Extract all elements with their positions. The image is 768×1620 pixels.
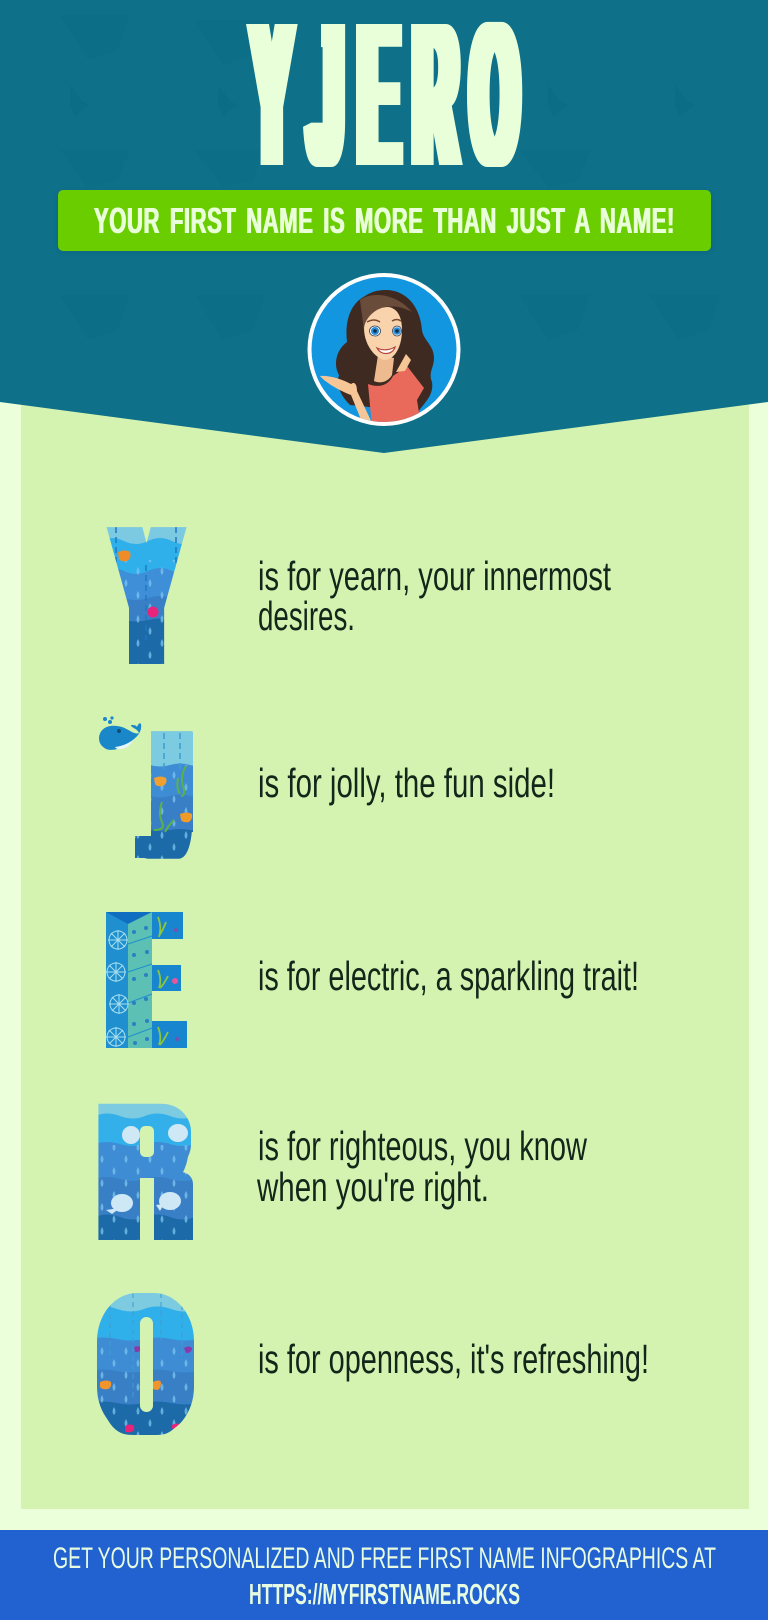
letter J illustration	[135, 731, 193, 859]
title letter J flag cover	[298, 18, 321, 103]
panel: header	[0, 0, 768, 453]
seaweed	[158, 917, 168, 1045]
wheels	[106, 930, 129, 1047]
fish	[118, 550, 131, 561]
letter O illustration	[96, 1293, 194, 1435]
text: Y line: is for yearn, your innermost	[258, 553, 611, 599]
starfish	[174, 928, 178, 932]
text: R line: is for righteous, you know	[258, 1123, 587, 1169]
slanted fold lines	[128, 936, 152, 1037]
fish	[134, 1346, 140, 1352]
letter E illustration	[106, 912, 187, 1048]
panel: content area	[21, 380, 749, 1509]
footer	[0, 1530, 768, 1620]
text: Y line: desires.	[258, 593, 355, 639]
arms and neck	[320, 376, 371, 421]
header butterfly texture	[60, 15, 720, 340]
arms	[152, 912, 183, 939]
footer url: HTTPS://MYFIRSTNAME.ROCKS	[249, 1579, 520, 1611]
letter R illustration	[95, 1102, 197, 1242]
tagline banner	[58, 190, 711, 252]
whales	[122, 1126, 140, 1144]
eyebrows	[367, 320, 401, 322]
shirt	[368, 366, 424, 427]
face	[364, 307, 402, 360]
text: R line: when you're right.	[256, 1164, 489, 1210]
folded top	[106, 912, 152, 924]
text: R line	[256, 1123, 587, 1210]
heart fish	[148, 606, 158, 618]
text: Y line	[258, 553, 611, 639]
hair	[336, 290, 434, 412]
dots on teal fold	[132, 926, 149, 1045]
fish	[154, 776, 167, 786]
letter Y illustration	[106, 527, 186, 664]
smile	[377, 347, 395, 354]
portrait: cartoon woman in circle	[308, 273, 460, 427]
whale icon	[99, 716, 141, 750]
seaweed	[154, 766, 186, 832]
eyes	[370, 326, 380, 336]
text: J line: is for jolly, the fun side!	[258, 760, 555, 806]
